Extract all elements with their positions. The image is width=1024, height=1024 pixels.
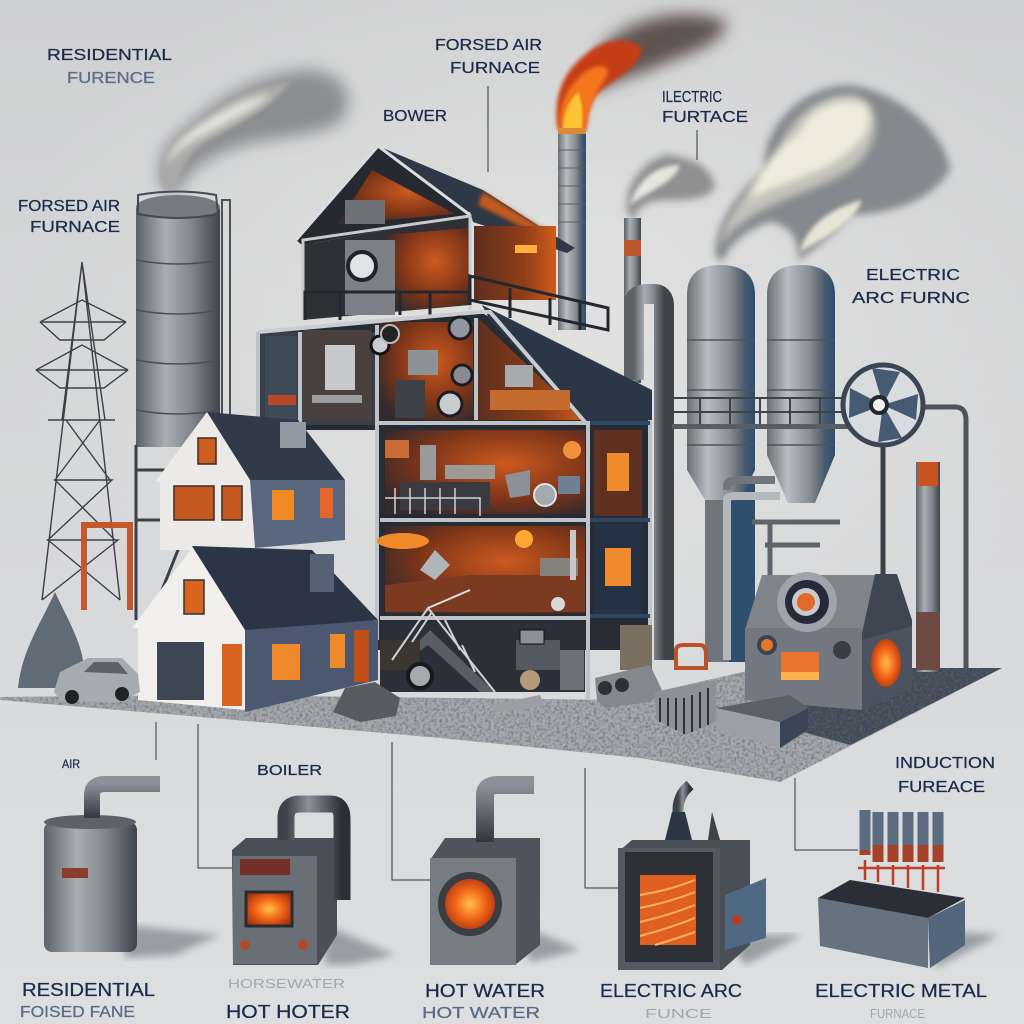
bottom label: residential: FOISED FANE	[20, 1004, 135, 1021]
upper cottage	[155, 412, 345, 550]
label: induction furnace	[895, 755, 995, 796]
leader lines	[156, 86, 858, 888]
left silo	[135, 192, 230, 620]
label: ilectric furtace: ILECTRIC	[662, 89, 722, 106]
ground slab	[0, 668, 1002, 782]
label: forsed air furnace left: FORSED AIR	[18, 198, 120, 215]
label: forsed air furnace top: FURNACE	[450, 60, 540, 77]
label: ilectric furtace	[662, 89, 748, 126]
bottom label: electric metal: FURNACE	[870, 1006, 925, 1021]
main chimney	[558, 128, 586, 330]
bottom label: hot water	[422, 981, 545, 1022]
label: air: AIR	[62, 757, 80, 771]
bottom label: electric metal	[815, 981, 987, 1021]
shrub	[18, 592, 85, 688]
room machinery	[312, 317, 585, 612]
label: ilectric furtace: FURTACE	[662, 109, 748, 126]
pylon	[36, 262, 128, 600]
smoke and fire: main chimney	[557, 14, 725, 130]
label: residential furnace: FURENCE	[67, 70, 155, 87]
unit 3: hot water	[430, 785, 580, 965]
label: electric arc furnace	[852, 267, 970, 307]
centre stack and pipes	[624, 218, 664, 660]
bottom label: electric metal: ELECTRIC METAL	[815, 981, 987, 1001]
label: induction furnace: FUREACE	[898, 779, 985, 796]
smoke: left silo	[160, 70, 348, 192]
bottom label: hot water: HOT WATER	[422, 1005, 540, 1022]
attic house	[296, 146, 608, 330]
lower house	[132, 546, 378, 712]
bottom label: hot water: HOT WATER	[425, 981, 545, 1001]
right towers	[672, 265, 850, 662]
car	[54, 658, 140, 704]
label: electric arc furnace: ELECTRIC	[866, 267, 960, 284]
label: forsed air furnace top: FORSED AIR	[435, 37, 542, 54]
furnace building on site	[745, 572, 912, 710]
fan and pipe	[843, 365, 966, 668]
control box	[716, 695, 808, 748]
unit 2: boiler	[232, 804, 395, 965]
site machine	[595, 625, 662, 708]
unit 5: induction	[818, 810, 1000, 968]
label: residential furnace: RESIDENTIAL	[47, 47, 172, 64]
bottom label: residential: RESIDENTIAL	[22, 980, 155, 1000]
label: forsed air furnace left	[18, 198, 120, 236]
bottom label: residential	[20, 980, 155, 1021]
small car	[333, 682, 400, 722]
bottom label: hot hoter	[226, 976, 350, 1022]
label: induction furnace: INDUCTION	[895, 755, 995, 772]
smoke: centre stack	[627, 155, 714, 220]
bottom label: electric arc	[600, 981, 742, 1021]
label: forsed air furnace top	[435, 37, 542, 77]
radiator crate	[655, 680, 716, 735]
main building	[258, 305, 652, 700]
right stack	[916, 462, 940, 672]
label: residential furnace	[47, 47, 172, 87]
unit 4: electric arc	[618, 785, 802, 970]
label: bower: BOWER	[383, 108, 447, 125]
bottom label: electric arc: ELECTRIC ARC	[600, 981, 742, 1001]
smoke: right towers	[716, 85, 950, 262]
basement and staircase	[380, 590, 585, 712]
bottom label: hot hoter: HOT HOTER	[226, 1002, 350, 1022]
label: electric arc furnace: ARC FURNC	[852, 290, 970, 307]
label: boiler: BOILER	[257, 762, 322, 779]
orange frame	[676, 645, 706, 670]
red pipe by pylon	[84, 525, 130, 610]
label: forsed air furnace left: FURNACE	[30, 219, 120, 236]
unit 1: tank	[44, 784, 220, 958]
bottom label: electric arc: FUNCE	[645, 1006, 712, 1021]
bottom label: hot hoter: HORSEWATER	[228, 976, 345, 991]
